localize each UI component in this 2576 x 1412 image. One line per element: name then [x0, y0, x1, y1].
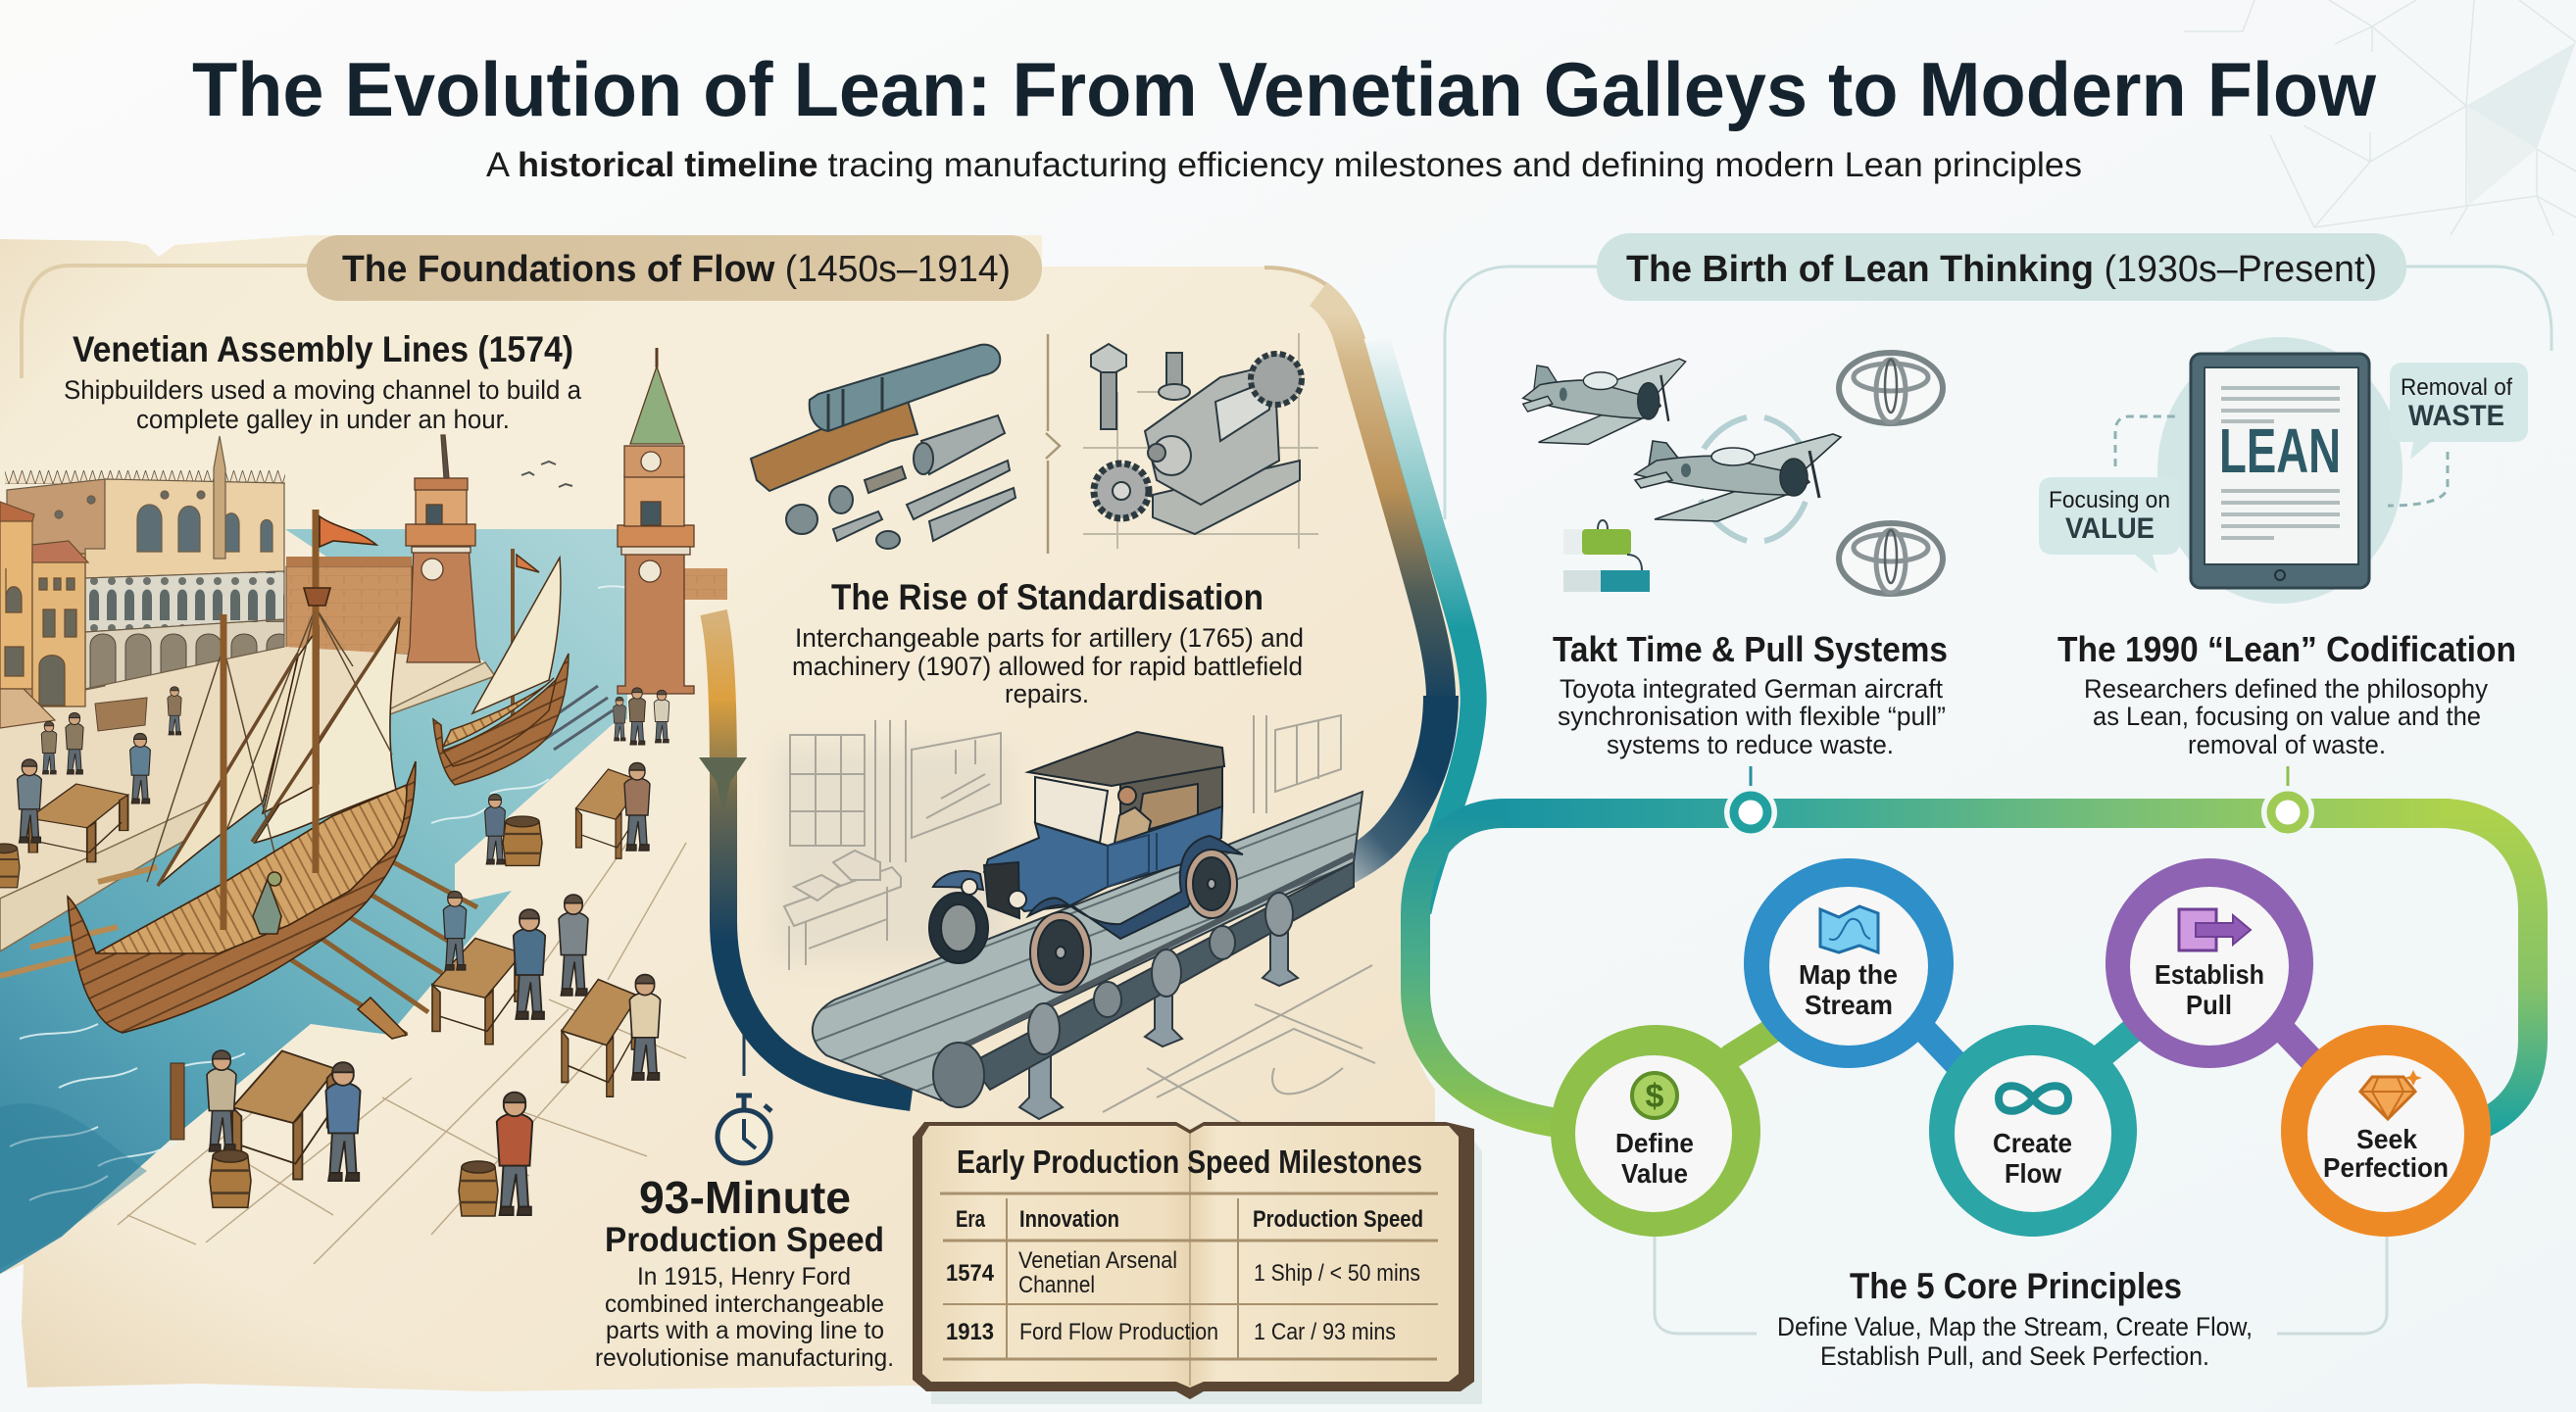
icon: Toyota emblem top	[1839, 353, 1943, 423]
panel sketches: factory background	[774, 715, 1375, 1137]
principle: map the stream: Stream	[1805, 990, 1893, 1020]
icon: stopwatch	[718, 1032, 771, 1163]
callout: focusing on value: Focusing on	[2049, 487, 2170, 513]
heading pill: foundations: The Foundations of Flow (1450s–1914)	[342, 249, 1011, 290]
text: takt time: systems to reduce waste.	[1607, 730, 1894, 759]
principle: define value: Value	[1621, 1158, 1688, 1189]
timeline node: takt time	[1724, 766, 1777, 839]
subtitle: A historical timeline tracing manufacturing efficiency milestones and defining modern Lean principles	[486, 146, 2082, 184]
workers and tables	[0, 687, 669, 1216]
text: 93-minute production speed: In 1915, Henry Ford	[637, 1263, 851, 1290]
principle: seek perfection	[2281, 1025, 2491, 1237]
text: 93-minute production speed: combined interchangeable	[605, 1290, 884, 1318]
model T car	[929, 732, 1243, 993]
connector: create flow to establish pull	[2104, 1017, 2149, 1054]
icons: artillery parts	[751, 345, 1016, 549]
timeline band: left gold to navy	[714, 612, 912, 1097]
text: Venetian assembly lines	[64, 329, 582, 434]
tower one	[406, 435, 480, 662]
principle: define value	[1551, 1025, 1760, 1237]
conveyor belt	[813, 792, 1362, 1119]
flow loop around principles	[1415, 813, 2533, 1125]
heading pill: birth of lean: The Birth of Lean Thinking (1930s–Present)	[1626, 249, 2377, 290]
principle: create flow: Flow	[2005, 1158, 2061, 1189]
bracket to core principles	[1655, 1237, 2387, 1334]
text: 1990 lean codification: as Lean, focusing on value and the	[2093, 702, 2481, 731]
text: 1990 lean codification	[2057, 629, 2516, 759]
small galley	[433, 549, 613, 785]
decorative corner facets	[2184, 0, 2576, 235]
connectors: dashed callout links	[2115, 416, 2448, 506]
arsenal wall	[286, 566, 412, 655]
waves	[10, 586, 627, 1200]
text: 93-minute production speed: parts with a moving line to	[606, 1317, 884, 1344]
text: 5 core principles: The 5 Core Principles	[1850, 1266, 2182, 1306]
principle: create flow	[1929, 1025, 2137, 1237]
principle: seek perfection: Seek	[2356, 1124, 2417, 1154]
text: Venetian assembly lines: complete galley in under an hour.	[136, 405, 510, 434]
text: takt time	[1553, 629, 1948, 759]
left townhouses	[0, 502, 88, 728]
connector: establish pull to seek	[2282, 1029, 2323, 1072]
callout: focusing on value	[2039, 477, 2180, 573]
table book: early production speed milestones: Early Production Speed Milestones	[957, 1144, 1422, 1180]
callout: removal of waste: Removal of	[2401, 374, 2512, 401]
principle: establish pull	[2105, 858, 2313, 1068]
table book: early production speed milestones: Ford Flow Production	[1019, 1319, 1218, 1345]
text: Venetian assembly lines: Shipbuilders used a moving channel to build a	[64, 375, 582, 405]
heading pill: birth of lean	[1597, 233, 2406, 301]
text: 93-minute production speed	[595, 1172, 894, 1372]
birds	[521, 462, 572, 487]
callout: removal of waste: WASTE	[2408, 400, 2504, 432]
text: Venetian assembly lines: Venetian Assembly Lines (1574)	[73, 329, 573, 369]
icon: LEAN tablet: LEAN	[2219, 415, 2341, 486]
teal link band	[1377, 340, 1473, 911]
text: 93-minute production speed: Production Speed	[605, 1221, 884, 1259]
icon: Toyota emblem bottom	[1839, 523, 1943, 594]
title: The Evolution of Lean: From Venetian Galleys to Modern Flow	[192, 46, 2376, 132]
text: rise of standardisation: machinery (1907) allowed for rapid battlefield	[792, 652, 1303, 681]
principle: map the stream	[1744, 858, 1954, 1068]
table book: early production speed milestones: Channel	[1018, 1272, 1095, 1298]
connector: define value to map	[1731, 1017, 1794, 1056]
text: 93-minute production speed: revolutionise manufacturing.	[595, 1344, 894, 1372]
connector: map to create flow	[1923, 1029, 1966, 1074]
text: 5 core principles: Establish Pull, and Seek Perfection.	[1820, 1341, 2209, 1371]
table book: early production speed milestones: Innovation	[1019, 1206, 1119, 1233]
divider with chevron	[1046, 334, 1060, 554]
timeline band: right tan to navy	[1318, 294, 1441, 698]
text: rise of standardisation	[792, 577, 1304, 708]
principle: define value: Define	[1615, 1128, 1694, 1158]
doge palace	[5, 436, 285, 706]
panel: foundations parchment	[0, 235, 1461, 1391]
plaza	[0, 549, 485, 899]
text: 1990 lean codification: The 1990 “Lean” Codification	[2057, 629, 2516, 669]
text: 1990 lean codification: Researchers defined the philosophy	[2084, 674, 2488, 704]
panel outline: birth of lean	[1445, 267, 2551, 519]
principle: define value: $	[1646, 1078, 1664, 1115]
icon: pull system gauges	[1563, 520, 1650, 592]
table book: early production speed milestones: Production Speed	[1253, 1206, 1423, 1233]
sea and channel	[0, 529, 627, 1274]
text: 5 core principles	[1777, 1266, 2253, 1371]
heading pill: foundations	[307, 235, 1042, 301]
table book: early production speed milestones: 1 Car / 93 mins	[1254, 1319, 1396, 1345]
table book: early production speed milestones	[913, 1122, 1482, 1404]
table book: early production speed milestones: Venetian Arsenal	[1018, 1247, 1177, 1274]
text: rise of standardisation: repairs.	[1005, 679, 1089, 708]
principle: map the stream: Map the	[1799, 959, 1898, 990]
principle: create flow: Create	[1993, 1128, 2072, 1158]
principle: seek perfection: Perfection	[2323, 1152, 2449, 1183]
text: takt time: Toyota integrated German aircraft	[1560, 674, 1943, 704]
text: rise of standardisation: The Rise of Standardisation	[831, 577, 1263, 617]
callout: removal of waste	[2390, 363, 2528, 460]
timeline node: lean codification	[2261, 766, 2314, 839]
text: 1990 lean codification: removal of waste.	[2188, 730, 2386, 759]
text: takt time: Takt Time & Pull Systems	[1553, 629, 1948, 669]
principle: establish pull: Pull	[2186, 990, 2232, 1020]
principle: establish pull: Establish	[2155, 959, 2264, 990]
text: takt time: synchronisation with flexible “pull”	[1558, 702, 1946, 731]
icon: LEAN tablet	[2157, 337, 2403, 604]
callout: focusing on value: VALUE	[2065, 512, 2155, 545]
main galley	[0, 510, 477, 1039]
table book: early production speed milestones: Era	[956, 1206, 985, 1233]
tower two with green spire	[618, 348, 694, 694]
paving lines	[118, 843, 686, 1264]
table book: early production speed milestones: 1913	[946, 1319, 994, 1345]
text: rise of standardisation: Interchangeable parts for artillery (1765) and	[795, 623, 1304, 653]
illustration: Venetian harbour	[0, 348, 727, 1274]
icon: aircraft and synchronisation rings	[1523, 359, 1841, 541]
timeline band: right fading tail	[1333, 696, 1441, 874]
arrow head on timeline	[699, 757, 747, 813]
table book: early production speed milestones: 1574	[946, 1260, 995, 1287]
text: 93-minute production speed: 93-Minute	[639, 1172, 851, 1223]
icons: bolts and machine	[1083, 333, 1318, 549]
table book: early production speed milestones: 1 Ship / < 50 mins	[1254, 1260, 1420, 1287]
text: 5 core principles: Define Value, Map the Stream, Create Flow,	[1777, 1312, 2253, 1341]
